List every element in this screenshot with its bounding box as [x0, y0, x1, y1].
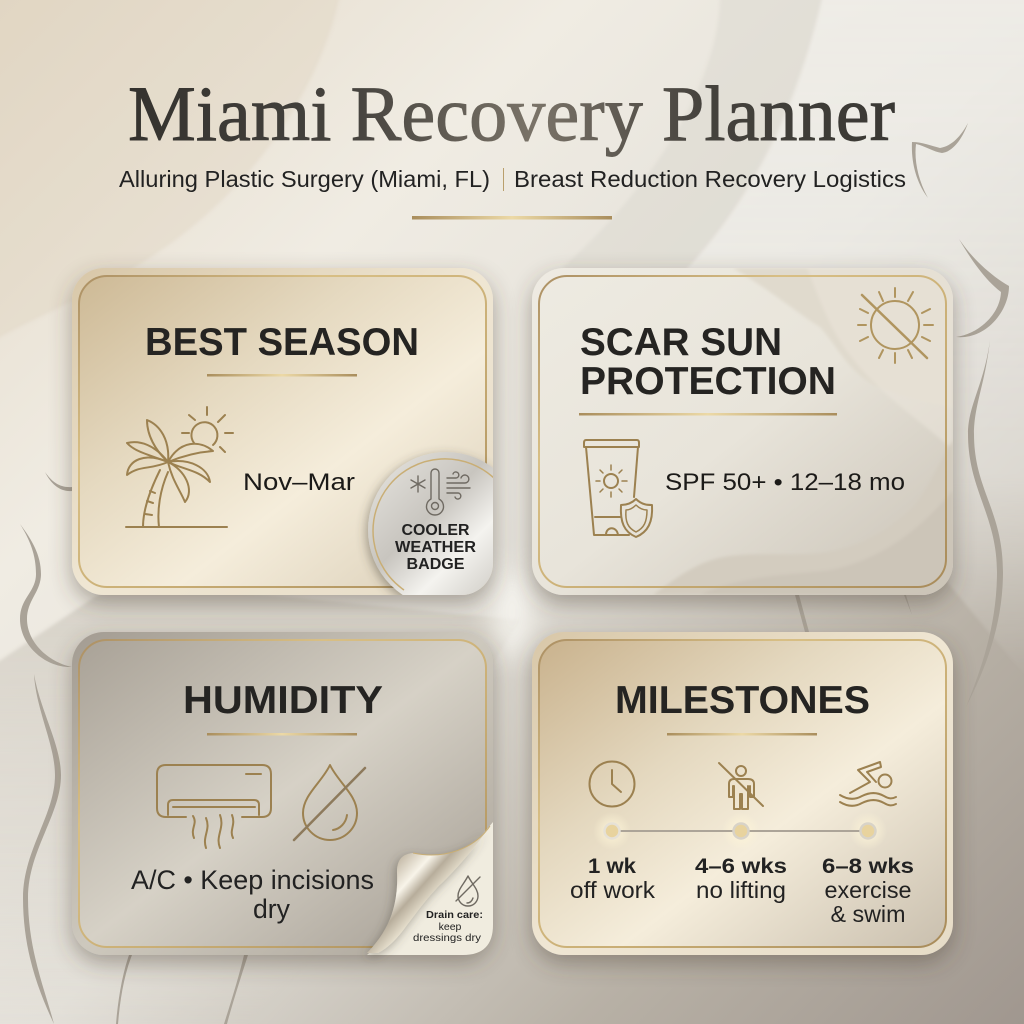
milestone: 1 week: [570, 855, 656, 903]
title: Miami Recovery Planner: [128, 70, 895, 157]
text: drain care note: dressings dry: [413, 932, 482, 944]
text: humidity advice: A/C • Keep incisions: [131, 865, 374, 895]
text: SPF duration: SPF 50+ • 12–18 mo: [665, 469, 905, 496]
text: drain care note: keep: [439, 921, 462, 933]
milestone: 6-8 weeks: 6–8 wks: [822, 855, 914, 878]
icon: swimmer: [840, 762, 896, 806]
badge: cooler weather: COOLER: [402, 522, 470, 539]
icon: sunscreen tube with shield: [584, 440, 652, 537]
heading: milestones: MILESTONES: [615, 679, 870, 722]
text: drain care note: Drain care:: [426, 909, 483, 921]
icon: no lifting person: [719, 763, 763, 809]
milestone: 6-8 weeks: & swim: [830, 901, 906, 927]
icon: small crossed drop: [456, 876, 480, 906]
icon: crossed-out sun: [858, 288, 933, 363]
milestone: 4-6 weeks: [695, 855, 787, 903]
badge: cooler weather: WEATHER: [395, 539, 476, 556]
icon: clock: [590, 762, 634, 806]
heading: scar sun protection: PROTECTION: [580, 360, 836, 403]
badge: cooler weather: [360, 449, 493, 595]
icon: palm tree and sun: [126, 407, 233, 527]
heading: scar sun protection: [580, 321, 836, 403]
milestone: 4-6 weeks: 4–6 wks: [695, 855, 787, 878]
icon: crossed-out water drop: [294, 765, 365, 840]
panel: milestones: [532, 632, 953, 955]
timeline: [593, 812, 887, 850]
heading: humidity: HUMIDITY: [183, 679, 383, 722]
peeled corner: drain care: [367, 822, 493, 955]
heading: scar sun protection: SCAR SUN: [580, 321, 782, 364]
milestone: 1 week: 1 wk: [588, 855, 636, 878]
milestone: 1 week: off work: [570, 877, 656, 903]
panel: scar sun protection: [532, 268, 953, 595]
badge: cooler weather: BADGE: [406, 556, 464, 573]
milestone: 6-8 weeks: [822, 855, 914, 927]
milestone: 4-6 weeks: no lifting: [696, 877, 786, 903]
panel: humidity: [72, 632, 493, 955]
milestone: 6-8 weeks: exercise: [824, 877, 912, 903]
text: humidity advice: [131, 865, 374, 924]
icon: air conditioner: [157, 765, 271, 848]
subtitle: Breast Reduction Recovery Logistics: [514, 166, 906, 192]
subtitle: Alluring Plastic Surgery (Miami, FL): [119, 166, 490, 192]
text: months: Nov–Mar: [243, 469, 355, 496]
panel: best season: [72, 268, 524, 608]
text: humidity advice: dry: [253, 894, 290, 924]
subtitle: [119, 166, 906, 192]
heading: best season: BEST SEASON: [145, 321, 419, 364]
text: drain care note: [413, 909, 483, 944]
